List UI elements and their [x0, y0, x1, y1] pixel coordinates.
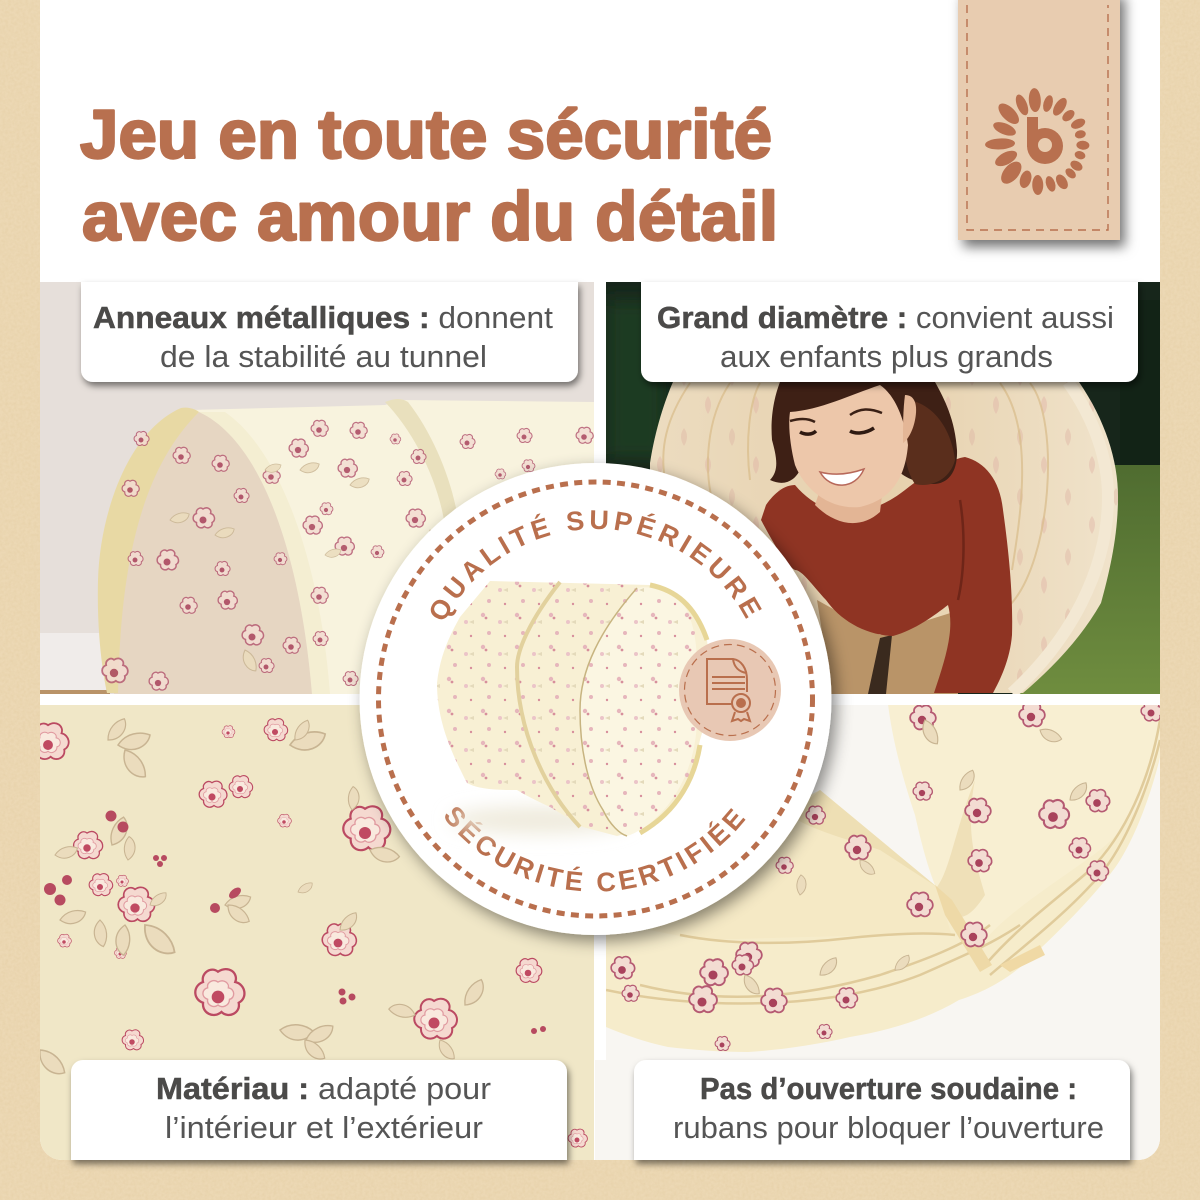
tunnel opening [114, 412, 312, 694]
child neck [815, 496, 882, 524]
product: folded tunnel [437, 581, 709, 836]
tunnel body [190, 400, 594, 694]
arc text: safety: SÉCURITÉ CERTIFIÉE [445, 807, 746, 892]
brand tag [958, 0, 1120, 240]
title [80, 96, 778, 255]
photo: ribbons holding tunnel folded [595, 701, 1163, 1160]
arc text: quality: QUALITÉ SUPÉRIEURE [430, 510, 762, 620]
certificate badge [679, 639, 781, 741]
tunnel opening [650, 382, 1118, 693]
photo: fabric detail [30, 705, 594, 1160]
icon: certificate [707, 659, 750, 721]
tunnel rim [98, 408, 199, 693]
label: metal rings: Anneaux métalliques : donnent [93, 300, 553, 335]
folded fabric rim [606, 757, 1160, 1052]
child eyes and mouth [790, 409, 882, 485]
child pants [817, 600, 960, 694]
label: large diameter [641, 282, 1138, 382]
label: metal rings [81, 282, 578, 382]
label: material [71, 1060, 567, 1160]
label: large diameter: Grand diamètre : convient aussi [657, 300, 1114, 335]
top drape [888, 705, 1160, 886]
label: no sudden opening: Pas d’ouverture soudaine : [700, 1071, 1077, 1106]
quality medallion [354, 458, 848, 952]
label: metal rings: de la stabilité au tunnel [160, 339, 487, 374]
fold shadows [606, 720, 1160, 1004]
label: material: l’intérieur et l’extérieur [165, 1110, 483, 1145]
label: large diameter: aux enfants plus grands [720, 339, 1053, 374]
child face [789, 385, 908, 507]
icon: sun logo [985, 88, 1090, 195]
label: no sudden opening: rubans pour bloquer l’ouverture [673, 1110, 1104, 1145]
label: material: Matériau : adapté pour [156, 1071, 491, 1106]
photo: child in tunnel [606, 282, 1160, 695]
ribbon knot [935, 885, 992, 972]
title: avec amour du détail [82, 178, 778, 255]
left wing [684, 790, 940, 918]
photo: tunnel side view with metal rings [40, 282, 594, 694]
child sweater [761, 457, 1012, 693]
child hair [770, 382, 957, 484]
title: Jeu en toute sécurité [80, 96, 772, 173]
label: no sudden opening [634, 1060, 1130, 1160]
